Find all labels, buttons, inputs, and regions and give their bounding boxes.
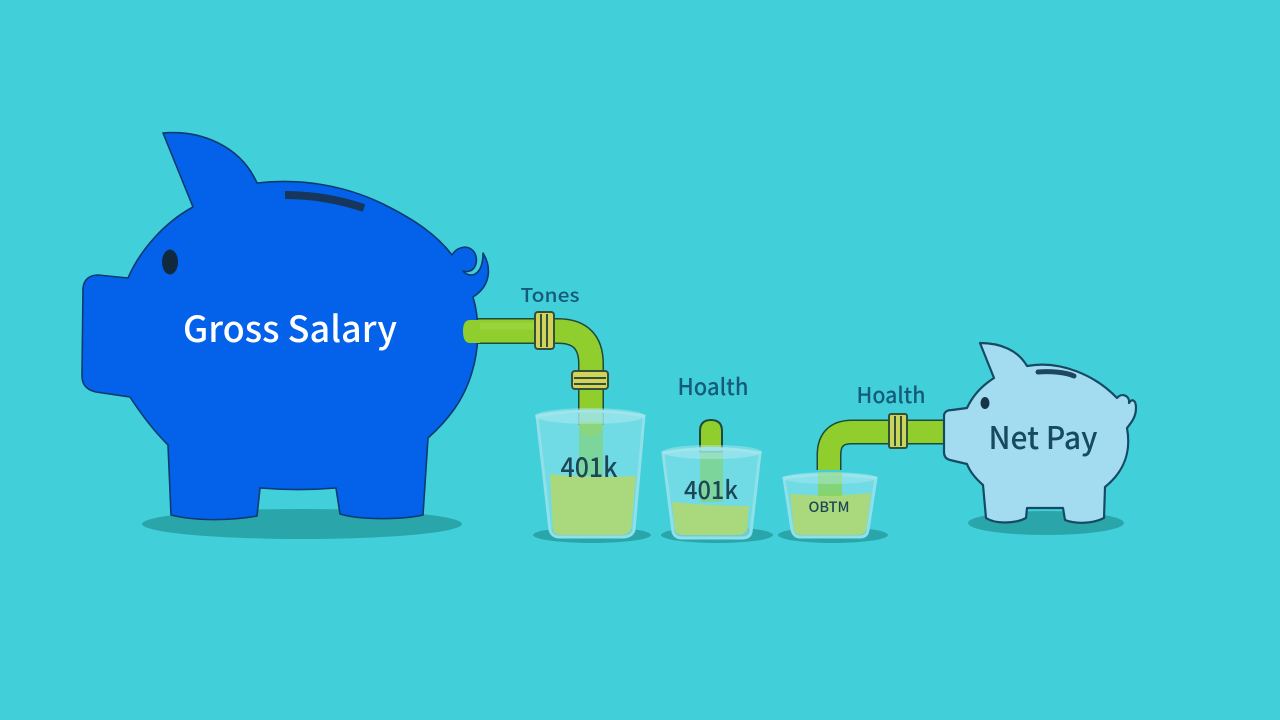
pig eye — [162, 250, 178, 274]
coin slot — [285, 195, 364, 208]
cup: 401k large — [535, 408, 645, 537]
coin slot — [1038, 372, 1074, 376]
ground shadows — [142, 509, 1124, 543]
pipe outlet inside pig — [463, 320, 480, 343]
pipe: gross salary to 401k cup — [470, 312, 608, 425]
cup: small — [783, 472, 877, 537]
label: Hoalth 2: Hoalth — [856, 378, 926, 410]
cup: small: OBTM — [808, 497, 850, 517]
cup: 401k medium — [662, 420, 762, 538]
cup: 401k medium: 401k — [684, 471, 739, 507]
label: Tones: Tones — [520, 281, 580, 308]
cup: 401k large: 401k — [560, 446, 618, 485]
label: Hoalth 1: Hoalth — [678, 368, 748, 402]
pig eye — [980, 397, 990, 409]
pig body — [82, 133, 488, 520]
pipe coupling horizontal — [535, 312, 554, 349]
short pipe — [700, 420, 722, 452]
pipe coupling — [889, 414, 907, 448]
piggy bank: gross salary — [82, 133, 488, 520]
pig label: Net Pay — [988, 413, 1098, 458]
pipe coupling vertical — [572, 371, 608, 389]
pipe: third cup to net pay — [829, 414, 950, 470]
pig label: Gross Salary — [183, 301, 397, 353]
piggy bank: net pay — [944, 343, 1136, 523]
pig body — [944, 343, 1136, 523]
